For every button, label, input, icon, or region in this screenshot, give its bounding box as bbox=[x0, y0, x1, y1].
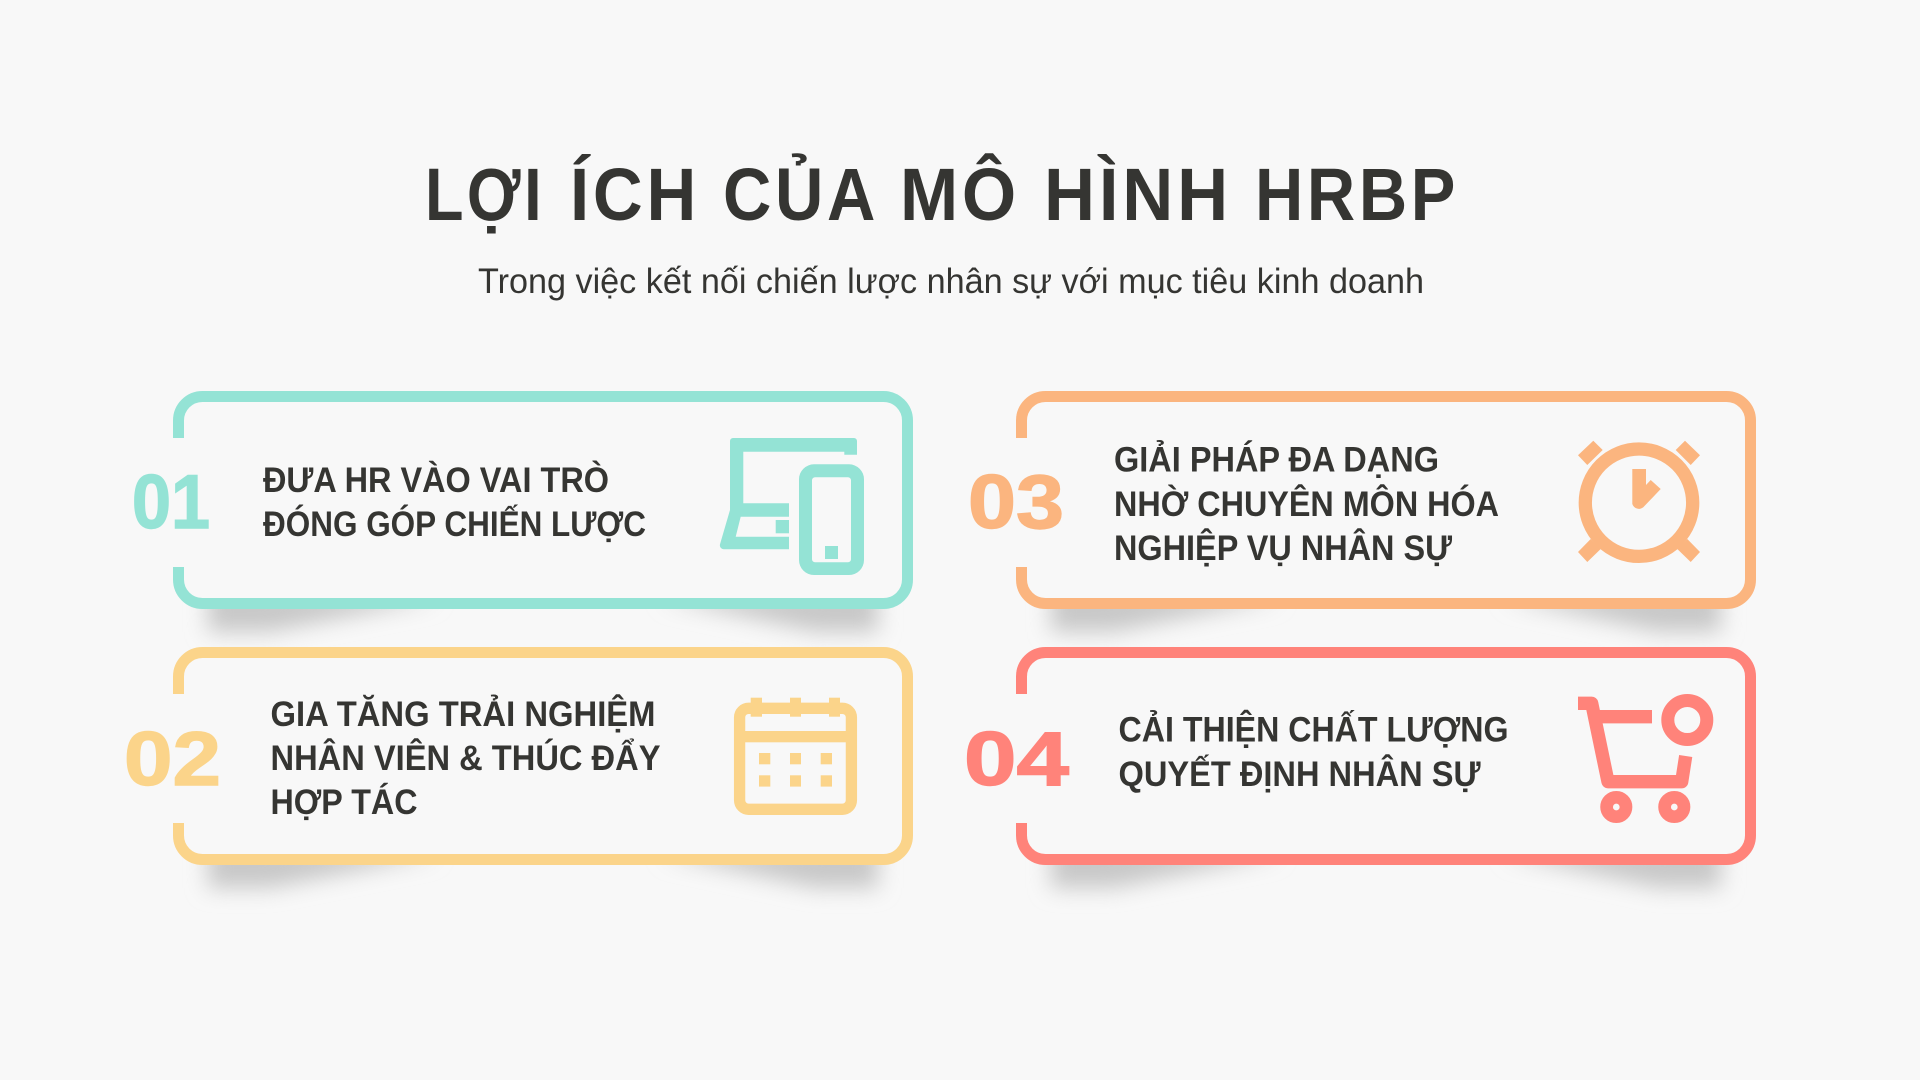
panel: 01 bbox=[132, 391, 913, 632]
text: ĐƯA HR VÀO VAI TRÒ bbox=[263, 460, 609, 500]
text bbox=[1118, 710, 1508, 794]
text: NHÂN VIÊN & THÚC ĐẨY bbox=[270, 738, 660, 778]
text: ĐÓNG GÓP CHIẾN LƯỢC bbox=[263, 504, 646, 544]
number 03: 03 bbox=[968, 460, 1064, 545]
icon: laptop and phone bbox=[720, 438, 864, 575]
icon: alarm clock bbox=[1578, 441, 1700, 562]
card shadow bbox=[208, 841, 878, 888]
text: GIẢI PHÁP ĐA DẠNG bbox=[1114, 440, 1439, 480]
title: CỦA bbox=[723, 153, 879, 236]
text: QUYẾT ĐỊNH NHÂN SỰ bbox=[1118, 754, 1481, 794]
card outline bbox=[178, 652, 908, 860]
subtitle: Trong việc kết nối chiến lược nhân sự với mục tiêu kinh doanh bbox=[478, 262, 1424, 301]
text: NHỜ CHUYÊN MÔN HÓA bbox=[1114, 484, 1499, 524]
title: HÌNH bbox=[1044, 153, 1232, 236]
title: MÔ bbox=[900, 153, 1020, 236]
card outline bbox=[1022, 396, 1750, 604]
text bbox=[263, 460, 646, 544]
card outline bbox=[178, 396, 908, 604]
panel: 04 bbox=[964, 647, 1756, 888]
card shadow bbox=[208, 585, 878, 632]
text bbox=[270, 694, 660, 822]
card outline bbox=[1022, 652, 1750, 860]
title: LỢI bbox=[425, 153, 545, 236]
card shadow bbox=[1051, 585, 1721, 632]
title bbox=[425, 153, 1459, 236]
text: CẢI THIỆN CHẤT LƯỢNG bbox=[1118, 710, 1508, 750]
text: GIA TĂNG TRẢI NGHIỆM bbox=[270, 694, 656, 734]
title: ÍCH bbox=[570, 153, 700, 236]
number 04: 04 bbox=[964, 717, 1069, 802]
number 01: 01 bbox=[132, 460, 210, 545]
title: HRBP bbox=[1255, 153, 1459, 236]
text: HỢP TÁC bbox=[270, 782, 418, 822]
panel: 03 bbox=[968, 391, 1756, 632]
panel: 02 bbox=[124, 647, 913, 888]
number 02: 02 bbox=[124, 717, 221, 802]
text bbox=[1114, 440, 1499, 568]
card shadow bbox=[1051, 841, 1721, 888]
icon: shopping cart bbox=[1578, 700, 1707, 817]
icon: calendar bbox=[734, 698, 857, 809]
text: NGHIỆP VỤ NHÂN SỰ bbox=[1114, 528, 1453, 568]
